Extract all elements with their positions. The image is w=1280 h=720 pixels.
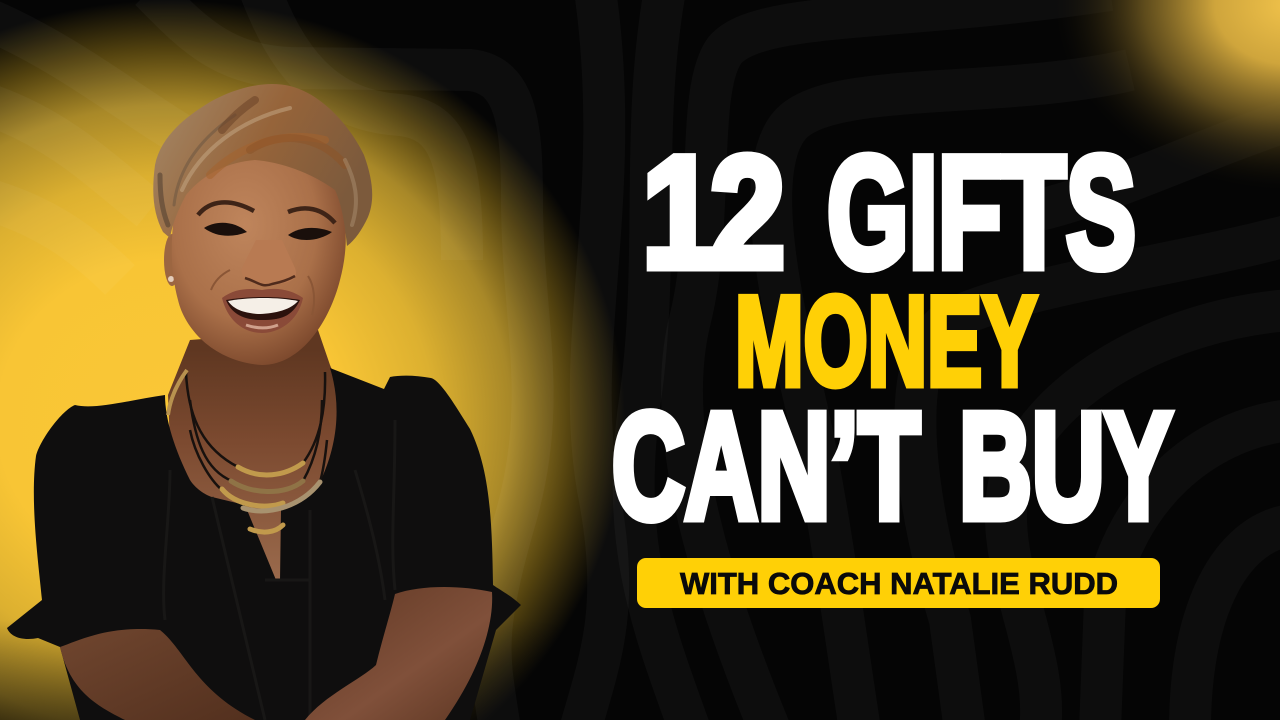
hair	[153, 84, 372, 246]
blouse folds	[164, 420, 395, 720]
title	[612, 123, 1172, 550]
face	[172, 151, 346, 365]
neck and chest	[168, 330, 345, 590]
mouth	[222, 289, 303, 333]
title line: CAN'T BUY: BUY	[959, 381, 1172, 550]
nose	[242, 240, 296, 284]
earring	[168, 276, 174, 282]
teeth	[228, 298, 298, 314]
title line: 12 GIFTS	[642, 123, 1136, 301]
ear	[164, 234, 180, 286]
left arm	[60, 629, 255, 720]
right eye	[288, 228, 332, 240]
gold necklace bars	[222, 463, 320, 532]
left eye	[204, 223, 247, 236]
person	[7, 84, 521, 720]
title line: MONEY: MONEY	[735, 270, 1037, 412]
subtitle text: WITH COACH NATALIE RUDD	[680, 566, 1118, 601]
smile lines	[211, 270, 314, 315]
subtitle pill	[637, 558, 1160, 608]
necklace cords	[186, 372, 327, 490]
hair streaks	[160, 100, 356, 225]
blouse	[7, 368, 521, 720]
title line: CAN'T BUY: CAN’T	[612, 381, 920, 550]
right arm	[305, 587, 492, 720]
top right glow	[1040, 0, 1280, 200]
mouth interior	[226, 297, 300, 320]
title line: 12 GIFTS: 12	[642, 124, 785, 301]
eyebrows	[198, 202, 335, 223]
gold necklace chain	[168, 370, 187, 415]
lower lip highlight	[246, 325, 278, 328]
